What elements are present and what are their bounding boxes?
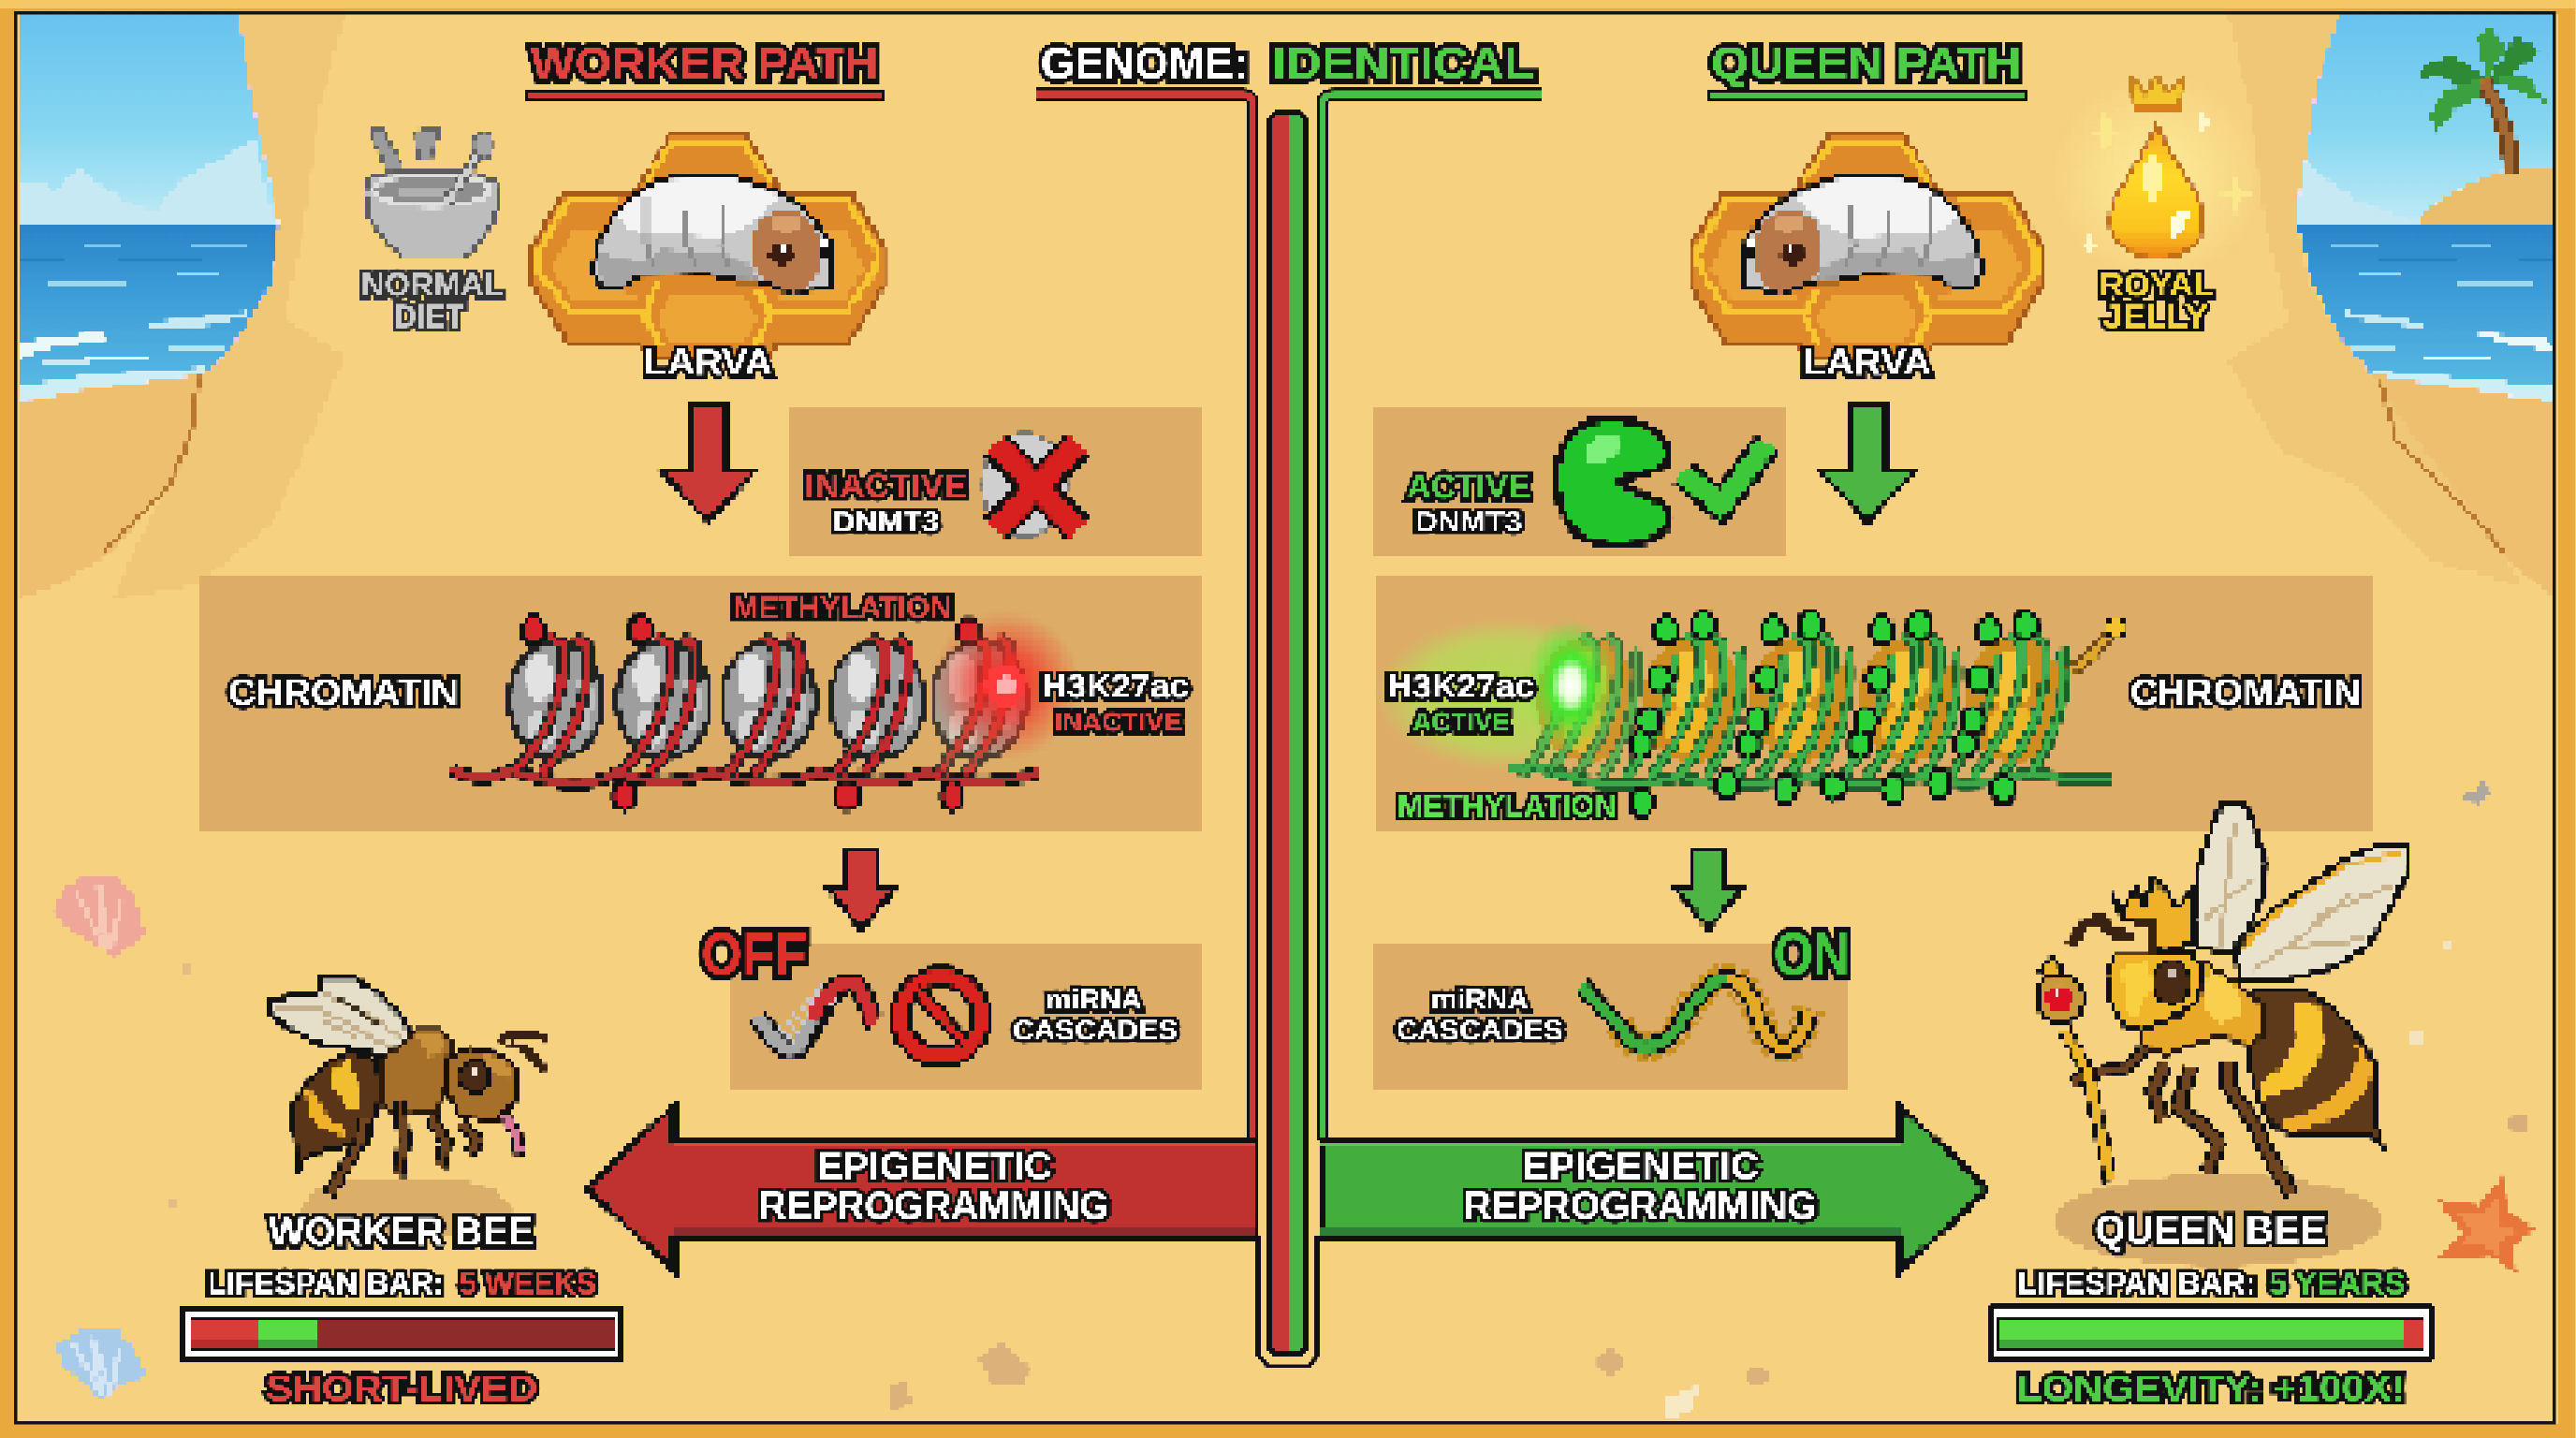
label: royal jelly: JELLY — [2103, 299, 2208, 335]
label: H3K27ac active — [1387, 668, 1534, 738]
shadow: queen bee — [2055, 1175, 2382, 1267]
chart: queen lifespan bar — [1987, 1304, 2434, 1362]
queen DNMT3 status: ACTIVE — [1407, 467, 1530, 506]
connector: red outer pipe from genome header — [1036, 95, 1252, 1140]
icon: silenced miRNA — [758, 983, 875, 1049]
heading: genome identical: GENOME: — [1041, 39, 1248, 89]
label: H3K27ac inactive — [1042, 668, 1189, 738]
icon: pink shell — [53, 874, 146, 959]
queen lifespan block — [1987, 1208, 2434, 1409]
panel: queen chromatin background — [1376, 575, 2374, 830]
icon: check mark — [1683, 444, 1767, 506]
queen miRNA module — [1397, 920, 1850, 1049]
chart: worker lifespan bar — [179, 1305, 624, 1362]
arrow body — [1321, 1107, 1988, 1270]
label: royal jelly — [2100, 267, 2214, 335]
worker miRNA module — [701, 920, 1178, 1057]
label: normal diet — [361, 267, 504, 335]
label: lifespan bar — [208, 1266, 596, 1300]
label: normal diet: NORMAL — [361, 267, 504, 303]
icon: starfish — [2437, 1176, 2537, 1272]
panel: worker chromatin background — [198, 575, 1201, 830]
icon: prohibition sign — [900, 976, 981, 1057]
icon: royal jelly drop with crown — [2049, 70, 2264, 286]
label: worker arrow text — [759, 1146, 1109, 1227]
heading: genome identical — [1041, 39, 1534, 89]
connector: green outer pipe from genome header — [1323, 95, 1541, 1140]
label: queen arrow text: EPIGENETIC — [1523, 1146, 1759, 1187]
arrow: queen chromatin to miRNA — [1670, 848, 1748, 932]
icon: normal diet bowl — [365, 128, 499, 257]
worker DNMT3 status: DNMT3 — [833, 507, 939, 537]
label: queen arrow text — [1464, 1146, 1817, 1227]
label: chromatin: CHROMATIN — [228, 672, 459, 713]
label: worker arrow text: REPROGRAMMING — [759, 1183, 1109, 1227]
heading: worker path: WORKER PATH — [531, 39, 878, 89]
shadow: worker bee — [300, 1178, 515, 1238]
arrow: queen larva to DNMT3 — [1814, 403, 1921, 525]
arrow: worker larva to DNMT3 — [655, 403, 762, 525]
label: H3K27ac inactive: H3K27ac — [1042, 668, 1189, 705]
heading: genome identical: IDENTICAL — [1272, 39, 1534, 89]
arrow: worker chromatin to miRNA — [822, 848, 901, 933]
label: longevity: LONGEVITY: +100X! — [2017, 1369, 2405, 1409]
label: miRNA cascades: miRNA — [1431, 983, 1529, 1016]
panel: queen miRNA background — [1374, 945, 1847, 1089]
worker DNMT3 status: INACTIVE — [805, 466, 967, 505]
label: worker bee: WORKER BEE — [269, 1210, 534, 1255]
nucleosome array with methylation markers — [1508, 611, 2125, 816]
icon: worker larva in honeycomb — [532, 135, 885, 359]
worker DNMT3 status — [805, 433, 1079, 537]
pale green glow — [1376, 618, 1638, 771]
label: lifespan bar: 5 YEARS — [2269, 1266, 2406, 1300]
icon: blue shell — [57, 1328, 146, 1400]
chromatin: worker silenced nucleosomes — [228, 591, 1189, 810]
label: H3K27ac active: ACTIVE — [1412, 708, 1510, 738]
illustration: worker bee — [270, 978, 546, 1194]
worker lifespan block — [179, 1210, 624, 1409]
panel: worker DNMT3 background — [788, 408, 1201, 557]
label: H3K27ac active: H3K27ac — [1387, 668, 1534, 705]
label: lifespan bar: LIFESPAN BAR: — [2017, 1266, 2256, 1300]
decorative sand objects: shells, starfish, pebbles — [53, 782, 2537, 1419]
queen DNMT3 status — [1407, 419, 1767, 545]
heading: queen path: QUEEN PATH — [1711, 39, 2021, 89]
label: royal jelly: ROYAL — [2100, 267, 2214, 303]
big arrow: queen epigenetic reprogramming — [1321, 1107, 1988, 1270]
label: chromatin: CHROMATIN — [2130, 672, 2361, 713]
label: miRNA cascades: CASCADES — [1013, 1016, 1178, 1046]
arrow body — [587, 1106, 1256, 1270]
panel: queen DNMT3 background — [1374, 408, 1786, 557]
big arrow: worker epigenetic reprogramming — [587, 1106, 1256, 1270]
label: miRNA cascades: CASCADES — [1397, 1016, 1563, 1046]
nucleosome array with methylation markers — [451, 616, 1039, 810]
label: miRNA cascades — [1013, 983, 1178, 1046]
label: lifespan bar — [2017, 1266, 2406, 1300]
label: lifespan bar: LIFESPAN BAR: — [208, 1266, 444, 1300]
icon: queen larva in honeycomb — [1690, 135, 2042, 359]
central genome pipe: red and green — [1266, 110, 1309, 1357]
label: queen larva: LARVA — [1803, 343, 1931, 383]
label: miRNA cascades: miRNA — [1046, 983, 1142, 1016]
label: short-lived: SHORT-LIVED — [266, 1369, 537, 1409]
icon: active miRNA — [1582, 978, 1809, 1049]
icon: crossed out enzyme — [982, 433, 1079, 536]
icon: active enzyme — [1556, 419, 1669, 545]
red inactive glow — [930, 610, 1080, 760]
label: on: ON — [1774, 920, 1850, 988]
label: methylation: METHYLATION — [733, 591, 952, 624]
label: worker larva: LARVA — [644, 343, 772, 383]
queen DNMT3 status: DNMT3 — [1415, 507, 1522, 537]
illustration: queen bee — [2037, 802, 2408, 1194]
panel: worker miRNA background — [729, 944, 1201, 1089]
label: off: OFF — [701, 920, 807, 988]
label: H3K27ac inactive: INACTIVE — [1055, 708, 1182, 738]
label: normal diet: DIET — [394, 299, 464, 335]
label: worker arrow text: EPIGENETIC — [817, 1146, 1052, 1187]
label: methylation: METHYLATION — [1398, 789, 1617, 823]
chromatin: queen active nucleosomes — [1376, 611, 2361, 823]
icon: pebbles — [168, 782, 2529, 1419]
connector: bottom U outline — [1258, 1236, 1318, 1366]
scene: right beach with palm — [2228, 15, 2557, 599]
label: queen bee: QUEEN BEE — [2095, 1208, 2326, 1253]
label: lifespan bar: 5 WEEKS — [460, 1266, 596, 1300]
label: queen arrow text: REPROGRAMMING — [1464, 1183, 1817, 1227]
label: miRNA cascades — [1397, 983, 1563, 1046]
scene: left beach — [17, 15, 344, 599]
